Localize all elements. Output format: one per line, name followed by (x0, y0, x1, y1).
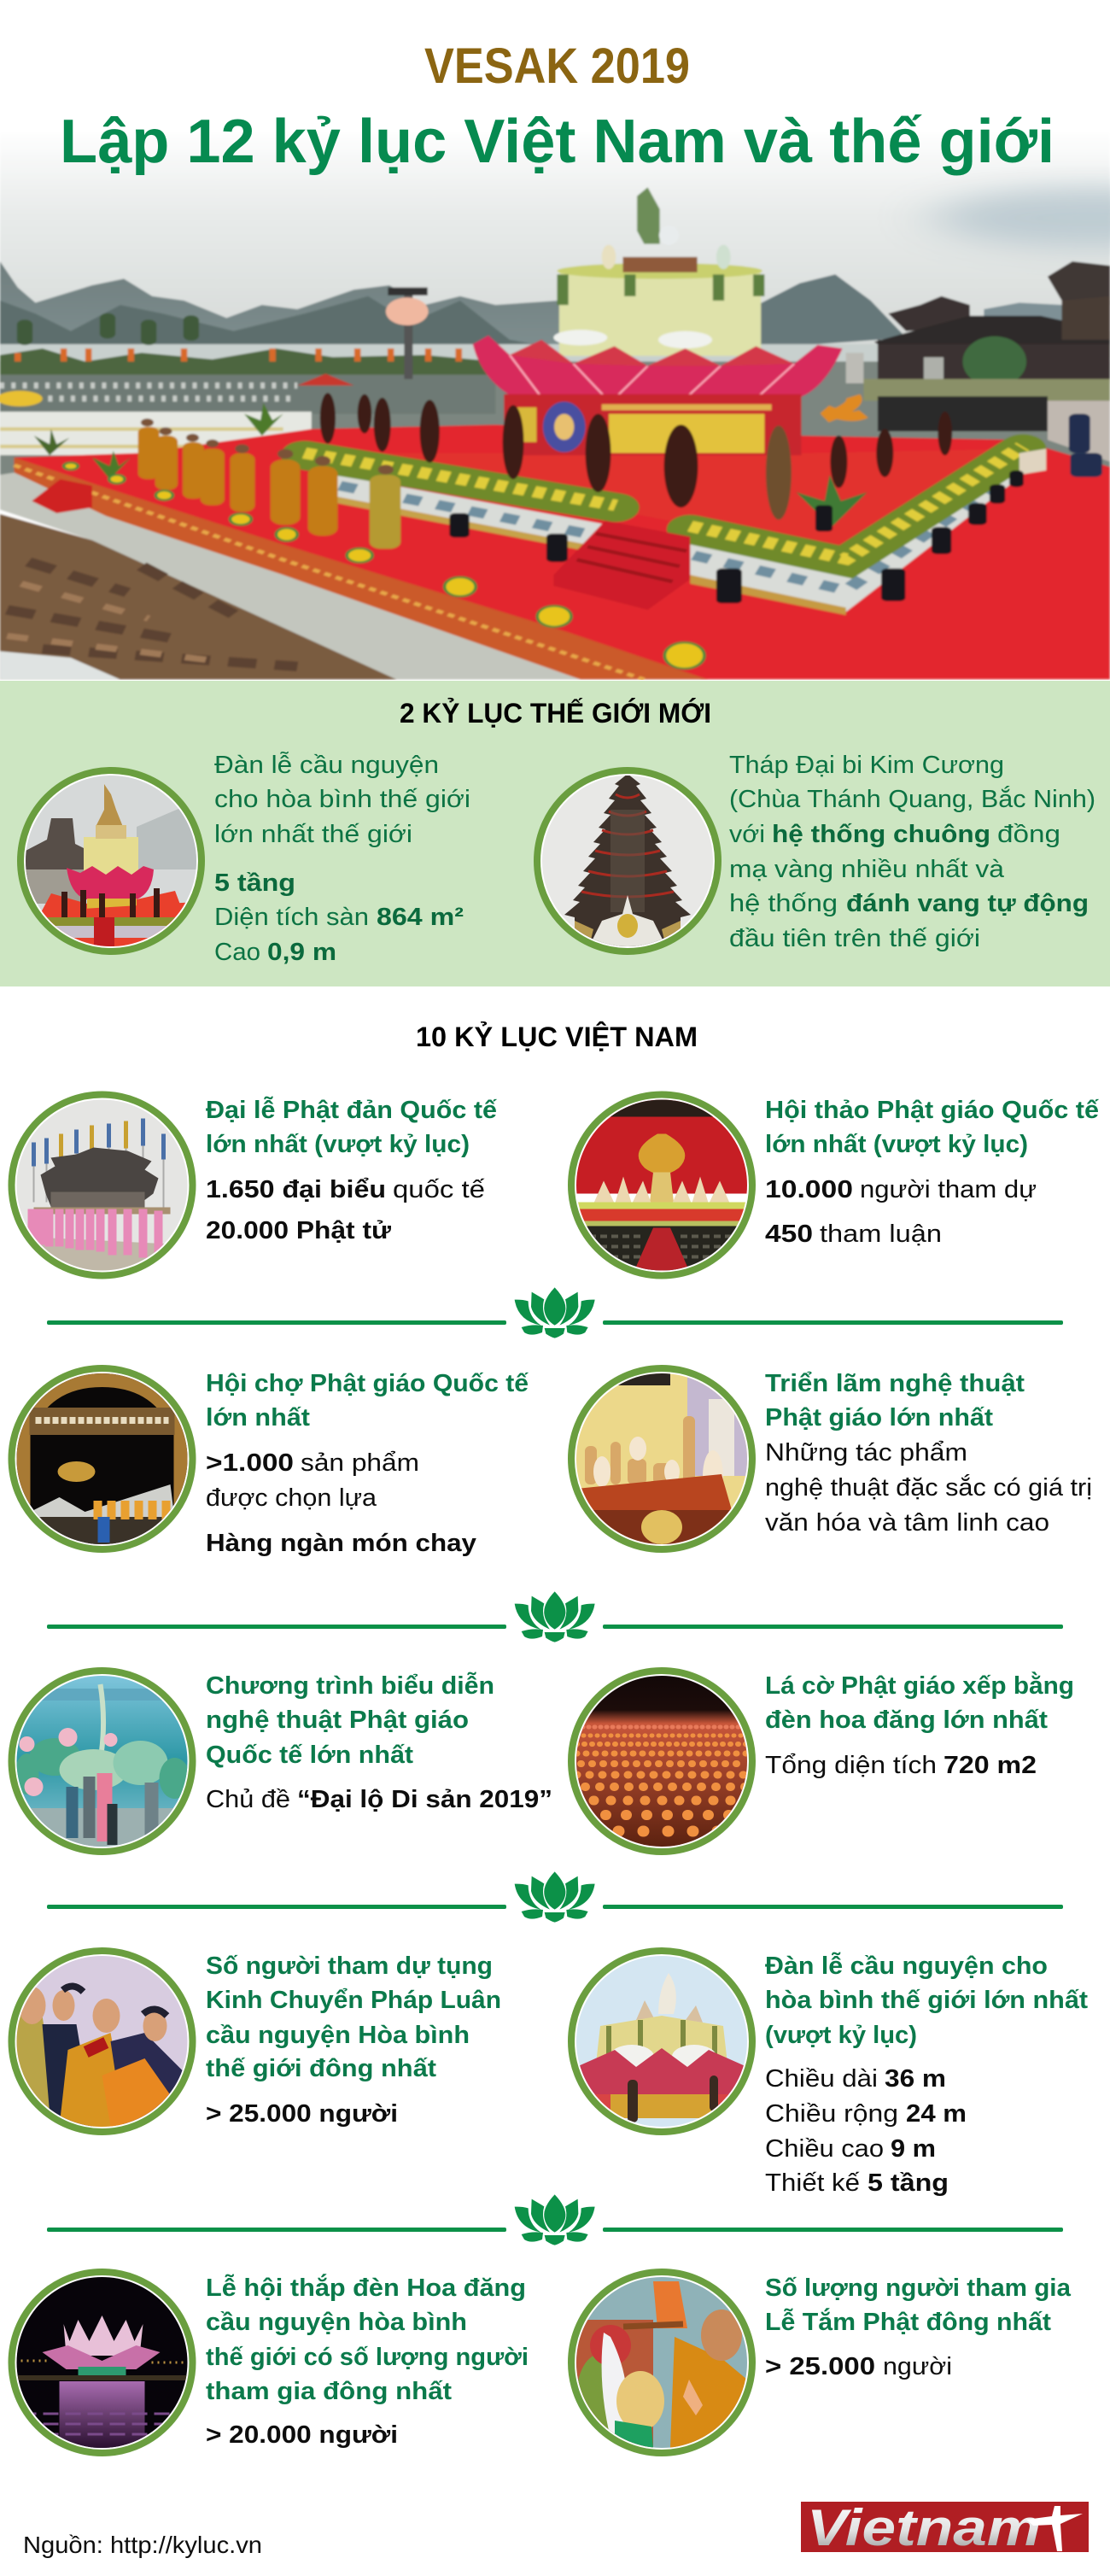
text: tower description: đánh vang tự động (846, 890, 1089, 917)
record: lantern festival (12, 2272, 529, 2453)
record: Buddhist fair (12, 1368, 529, 1557)
text: tower description: đồng (997, 821, 1060, 848)
record: sutra chanting (12, 1951, 501, 2132)
outer red floor (15, 424, 1110, 680)
ground behind stage (0, 361, 1110, 475)
text: Buddhist conference: người tham dự (860, 1176, 1037, 1203)
text: lantern flag: Tổng diện tích (765, 1752, 937, 1779)
text: Buddhist fair: Hội chợ Phật giáo Quốc tế (206, 1370, 529, 1397)
text: tower description: Tháp Đại bi Kim Cương (729, 752, 1004, 779)
text: Buddhist conference: tham luận (820, 1221, 942, 1248)
text: Buddhist conference: Hội thảo Phật giáo Quốc tế (765, 1097, 1100, 1124)
source note: Nguồn: http://kyluc.vn (23, 2532, 262, 2558)
text: altar description: 5 tầng (214, 869, 295, 897)
text: Buddhist conference: 450 (765, 1221, 813, 1248)
text: altar description: Đàn lễ cầu nguyện (214, 751, 439, 779)
front border (15, 458, 708, 680)
record: prayer altar (20, 751, 470, 966)
stage lamps (449, 471, 1024, 603)
photo: exhibition table (571, 1368, 752, 1549)
text: sutra chanting: > 25.000 người (206, 2100, 398, 2128)
text: prayer altar Vietnam: 9 m (891, 2135, 936, 2163)
text: prayer altar Vietnam: Đàn lễ cầu nguyện cho (765, 1951, 1048, 1980)
cake stage (559, 271, 761, 356)
text: lantern flag (765, 1671, 1074, 1779)
text: Buddhist fair: sản phẩm (301, 1449, 419, 1477)
text: art exhibition: Phật giáo lớn nhất (765, 1404, 993, 1431)
heading: 2 world records: 2 KỶ LỤC THẾ GIỚI MỚI (400, 698, 711, 729)
text: Buddhist conference: lớn nhất (vượt kỷ lục) (765, 1131, 1028, 1158)
text: sutra chanting: cầu nguyện Hòa bình (206, 2022, 470, 2049)
text: prayer altar Vietnam: Thiết kế (765, 2169, 860, 2197)
text: altar description: 0,9 m (267, 939, 336, 966)
divider: lotus 1 (47, 1287, 1063, 1338)
hero photo: stage of the Vesak ceremony (0, 158, 1110, 680)
text: prayer altar Vietnam: Chiều cao (765, 2135, 884, 2163)
record: Buddhist conference (571, 1095, 1100, 1276)
text: international Vesak: 20.000 Phật tử (206, 1217, 391, 1244)
lower tier red sign (504, 395, 801, 455)
text: prayer altar Vietnam: 5 tầng (868, 2169, 949, 2197)
record: art exhibition (571, 1368, 1092, 1549)
text: sutra chanting (206, 1952, 501, 2128)
logo: Vietnam+: Vietnam (807, 2499, 1041, 2556)
text: art performance: nghệ thuật Phật giáo (206, 1707, 469, 1734)
statues (320, 393, 952, 507)
photo: lantern field (571, 1671, 752, 1852)
photo: altar in blue sky (571, 1951, 752, 2132)
monks (138, 427, 337, 536)
text: Buddhist fair: Hàng ngàn món chay (206, 1530, 476, 1557)
text: altar description: 864 m² (377, 904, 464, 931)
record: Dai bi Kim Cuong tower (537, 752, 1095, 952)
text: tower description: hệ thống (729, 890, 838, 917)
text: prayer altar Vietnam: Chiều dài (765, 2065, 878, 2093)
text: tower description: mạ vàng nhiều nhất và (729, 856, 1005, 883)
photo: teal stage (12, 1671, 193, 1852)
text: lantern festival (206, 2273, 529, 2449)
text: prayer altar Vietnam (765, 1951, 1088, 2197)
text: Buddhist fair: được chọn lựa (206, 1484, 377, 1512)
text: lantern festival: tham gia đông nhất (206, 2378, 452, 2405)
text: altar description: Cao (214, 939, 260, 966)
text: Buddhist conference (765, 1097, 1100, 1248)
text: prayer altar Vietnam: Chiều rộng (765, 2100, 898, 2128)
text: prayer altar Vietnam: 24 m (906, 2100, 967, 2128)
record: art performance (12, 1671, 552, 1852)
photo: flags and temple (12, 1095, 193, 1276)
text: art performance: Chương trình biểu diễn (206, 1671, 494, 1700)
text: international Vesak: lớn nhất (vượt kỷ lục) (206, 1131, 470, 1158)
text: art performance: Quốc tế lớn nhất (206, 1742, 413, 1769)
temple right (878, 340, 1110, 383)
text: international Vesak: 1.650 đại biểu (206, 1176, 386, 1203)
yellow lotus lamps (64, 463, 704, 669)
text: international Vesak (206, 1095, 498, 1244)
text: art exhibition: nghệ thuật đặc sắc có giá trị (765, 1473, 1092, 1502)
text: lantern festival: Lễ hội thắp đèn Hoa đăng (206, 2273, 526, 2302)
photo: monks chanting (12, 1951, 193, 2132)
plants and people (34, 429, 69, 455)
text: art performance: Chủ đề (206, 1786, 290, 1813)
text: tower description: đầu tiên trên thế giới (729, 925, 980, 952)
divider: lotus 4 (47, 2194, 1063, 2245)
photo: night gate (12, 1368, 193, 1549)
text: sutra chanting: thế giới đông nhất (206, 2055, 436, 2082)
text: altar description: lớn nhất thế giới (214, 821, 412, 848)
text: Buddhist fair (206, 1370, 529, 1557)
text: lantern flag: 720 m2 (944, 1752, 1037, 1779)
heading: 10 Vietnam records: 10 KỶ LỤC VIỆT NAM (416, 1022, 698, 1052)
record: lantern flag (571, 1671, 1074, 1852)
text: lantern festival: cầu nguyện hòa bình (206, 2309, 467, 2336)
text: Buddha bathing: Số lượng người tham gia (765, 2274, 1072, 2302)
text: tower description (729, 752, 1095, 952)
text: Buddha bathing (765, 2274, 1072, 2380)
text: prayer altar Vietnam: hòa bình thế giới lớn nhất (765, 1987, 1088, 2014)
title: main headline: Lập 12 kỷ lục Việt Nam và thế giới (60, 108, 1054, 176)
text: sutra chanting: Kinh Chuyển Pháp Luân (206, 1987, 501, 2014)
record: Buddha bathing (571, 2272, 1072, 2453)
text: art exhibition: Những tác phẩm (765, 1439, 967, 1467)
photo: prayer altar (20, 770, 202, 951)
flower garland and walls (336, 475, 609, 549)
text: lantern flag: Lá cờ Phật giáo xếp bằng (765, 1671, 1074, 1700)
lotus bowl (473, 336, 843, 397)
text: tower description: hệ thống chuông (772, 821, 990, 848)
text: prayer altar Vietnam: (vượt kỷ lục) (765, 2022, 917, 2049)
light tower (404, 292, 412, 379)
text: tower description: với (729, 821, 765, 848)
text: international Vesak: quốc tế (393, 1176, 485, 1203)
road and rocks (0, 472, 581, 680)
panel: 2 new world records (0, 681, 1110, 986)
photo: monk bathing Buddha (571, 2272, 752, 2453)
text: art exhibition (765, 1370, 1092, 1537)
record: international Vesak (12, 1095, 498, 1276)
text: prayer altar Vietnam: 36 m (885, 2065, 946, 2093)
text: art exhibition: Triển lãm nghệ thuật (765, 1370, 1025, 1397)
text: altar description: Diện tích sàn (214, 904, 369, 931)
text: sutra chanting: Số người tham dự tụng (206, 1952, 493, 1980)
photo: pagoda tower (537, 770, 718, 951)
text: lantern festival: > 20.000 người (206, 2421, 398, 2449)
divider: lotus 3 (47, 1871, 1063, 1923)
title: VESAK 2019: VESAK 2019 (424, 38, 690, 94)
text: art performance (206, 1671, 552, 1813)
text: Buddha bathing: Lễ Tắm Phật đông nhất (765, 2307, 1051, 2336)
photo: conference hall (571, 1095, 752, 1276)
text: Buddhist fair: lớn nhất (206, 1404, 310, 1431)
text: altar description: cho hòa bình thế giới (214, 786, 470, 813)
text: Buddha bathing: > 25.000 (765, 2353, 875, 2380)
logo: Vietnam+ (801, 2499, 1089, 2556)
text: Buddhist fair: >1.000 (206, 1449, 294, 1477)
text: altar description (214, 751, 470, 966)
text: international Vesak: Đại lễ Phật đản Quốc tế (206, 1095, 498, 1124)
text: lantern festival: thế giới có số lượng người (206, 2344, 529, 2371)
text: Buddha bathing: người (883, 2353, 952, 2380)
record: prayer altar Vietnam (571, 1951, 1088, 2197)
photo: night lotus (12, 2272, 193, 2453)
text: lantern flag: đèn hoa đăng lớn nhất (765, 1707, 1048, 1734)
divider: lotus 2 (47, 1591, 1063, 1642)
text: art exhibition: văn hóa và tâm linh cao (765, 1509, 1049, 1537)
text: art performance: “Đại lộ Di sản 2019” (297, 1786, 552, 1813)
text: Buddhist conference: 10.000 (765, 1176, 853, 1203)
stairs (553, 520, 690, 610)
text: tower description: (Chùa Thánh Quang, Bắc Ninh) (729, 785, 1095, 813)
